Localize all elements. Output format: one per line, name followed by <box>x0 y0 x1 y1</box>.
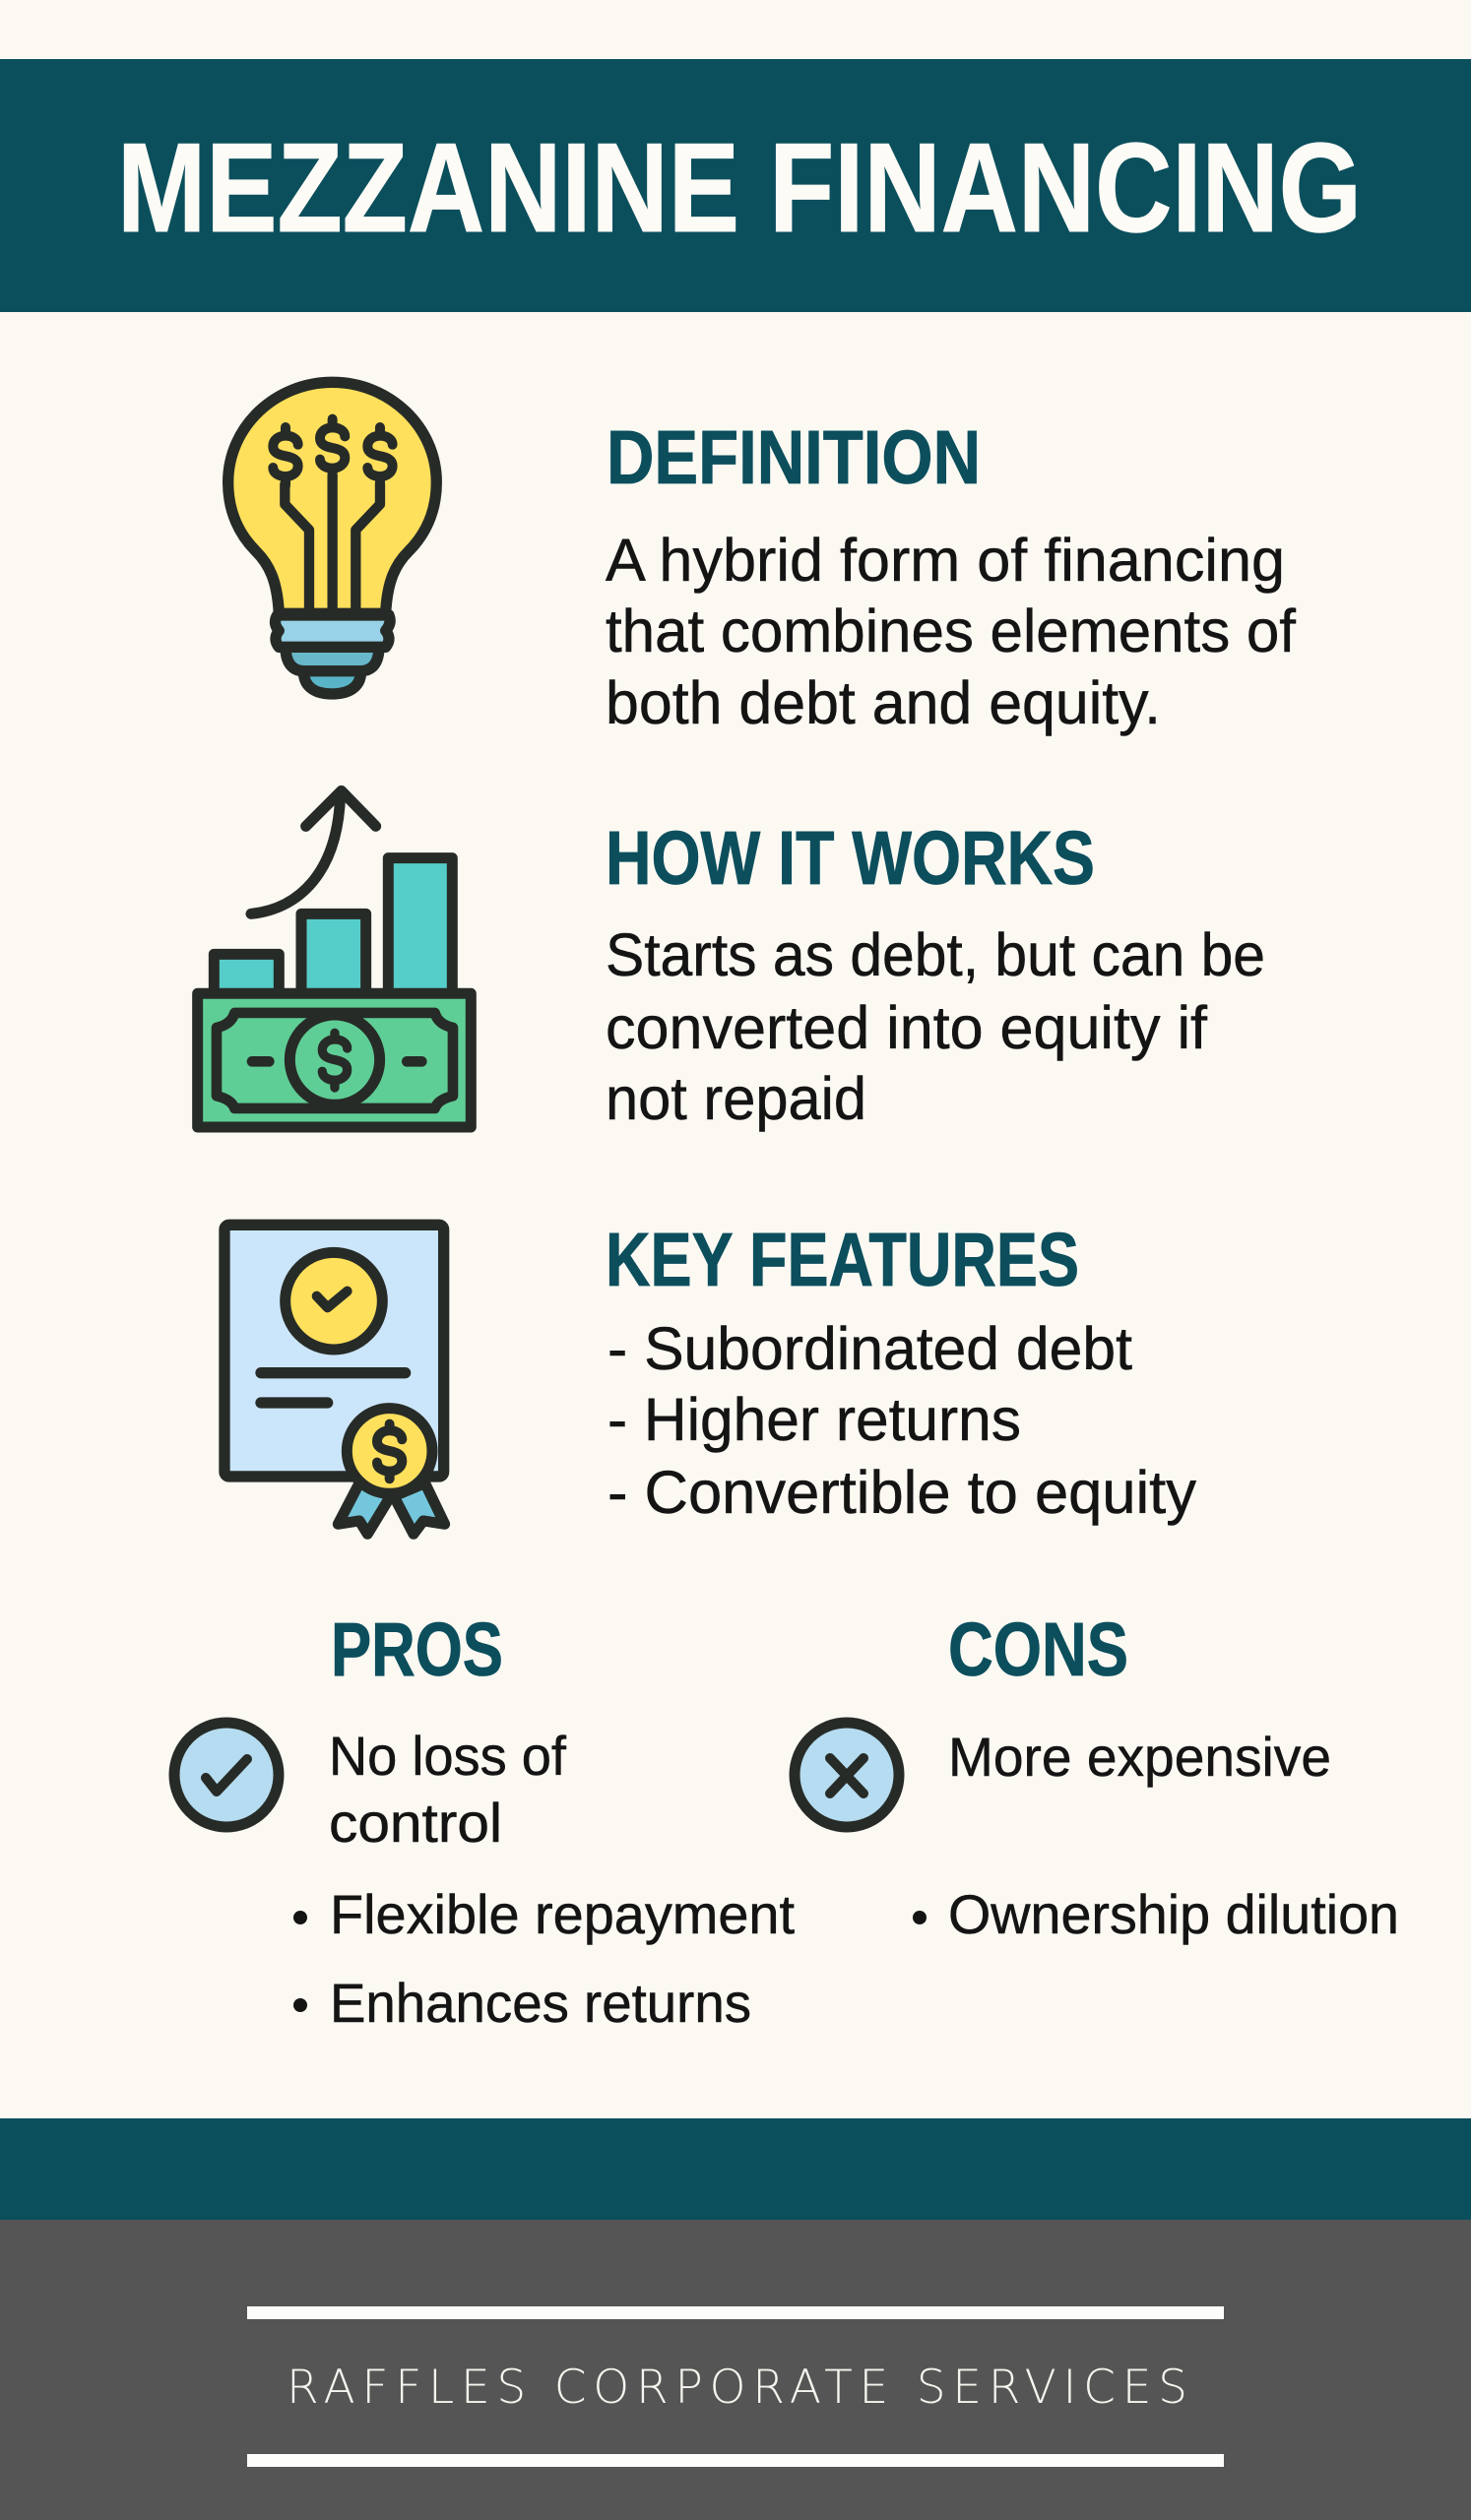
panel: key features: KEY FEATURES <box>606 1218 1079 1302</box>
panel: key features: - Higher returns <box>608 1386 1021 1453</box>
panel: key features <box>606 1218 1196 1526</box>
panel: definition: DEFINITION <box>607 415 981 500</box>
teal band <box>0 2118 1471 2220</box>
panel: cons: CONS <box>948 1607 1128 1692</box>
icon: bar chart on banknote <box>198 790 471 1127</box>
panel: definition <box>606 415 1297 736</box>
title banner <box>0 59 1471 312</box>
panel: key features: - Convertible to equity <box>608 1459 1196 1526</box>
panel: how it works: converted into equity if <box>606 994 1208 1061</box>
panel: pros: No loss of <box>329 1725 566 1787</box>
panel: definition: both debt and equity. <box>606 669 1161 736</box>
footer <box>0 2220 1471 2520</box>
panel: key features: - Subordinated debt <box>608 1315 1132 1382</box>
panel: definition: that combines elements of <box>606 598 1297 664</box>
panel: pros: Enhances returns <box>330 1972 751 2034</box>
icon: check mark <box>174 1723 279 1827</box>
panel: cons: Ownership dilution <box>948 1883 1399 1945</box>
panel: how it works: Starts as debt, but can be <box>606 921 1265 988</box>
panel: cons <box>795 1607 1399 1945</box>
panel: pros: control <box>329 1792 502 1854</box>
icon: certificate with medal <box>224 1225 445 1534</box>
icon: cross mark <box>795 1723 899 1827</box>
panel: pros: Flexible repayment <box>330 1883 795 1945</box>
panel: definition: A hybrid form of financing <box>606 527 1285 594</box>
panel: how it works <box>606 816 1265 1132</box>
footer: RAFFLES CORPORATE SERVICES <box>287 2361 1187 2415</box>
icon: light bulb with dollar signs <box>228 382 436 694</box>
panel: how it works: HOW IT WORKS <box>606 816 1095 901</box>
panel: pros: PROS <box>331 1607 503 1692</box>
panel: pros <box>174 1607 795 2034</box>
panel: cons: More expensive <box>948 1726 1331 1788</box>
panel: how it works: not repaid <box>606 1065 866 1132</box>
